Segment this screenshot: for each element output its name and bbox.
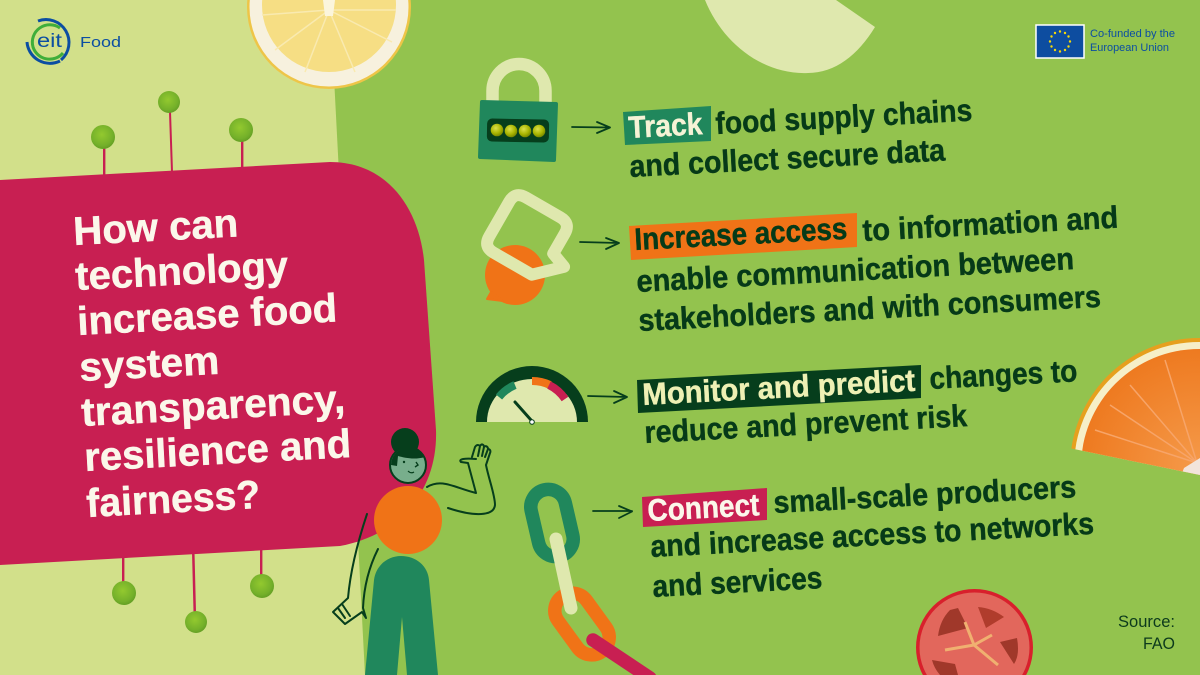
item: increase access: to information and — [862, 200, 1119, 248]
item: connect: small-scale producers — [773, 469, 1077, 520]
logo: EIT Food: eit — [37, 31, 63, 52]
title: resilience and — [83, 422, 352, 480]
title — [72, 201, 352, 526]
icon: chain links — [527, 486, 650, 675]
icon: padlock — [478, 64, 558, 162]
item: connect: Connect — [647, 487, 760, 528]
EU funding text: European Union — [1090, 42, 1169, 54]
pale left panel — [0, 0, 365, 675]
torso — [374, 486, 442, 554]
item: track — [623, 93, 973, 184]
arrow — [572, 122, 610, 133]
logo: EIT Food — [27, 20, 121, 63]
logo: EIT Food: Food — [80, 34, 121, 51]
peas on stems: bottom — [112, 549, 274, 633]
hair bun — [391, 428, 419, 456]
item: increase access — [629, 200, 1119, 338]
pale decorative wedge — [705, 0, 875, 73]
title: transparency, — [80, 377, 346, 435]
title panel — [0, 162, 436, 565]
source: FAO — [1143, 634, 1175, 653]
item: track: and collect secure data — [629, 132, 947, 184]
lemon slice — [247, 0, 411, 89]
arrow — [580, 238, 619, 249]
item: track: food supply chains — [715, 93, 973, 141]
item: increase access: stakeholders and with consumers — [638, 279, 1102, 338]
legs — [365, 556, 438, 675]
item: monitor and predict — [637, 353, 1078, 450]
item: increase access: Increase access — [634, 211, 848, 257]
person illustration — [333, 428, 495, 675]
item: connect — [642, 469, 1095, 604]
item: connect: and increase access to networks — [650, 506, 1095, 564]
title: fairness? — [85, 473, 261, 526]
orange slice — [1071, 338, 1200, 475]
item: connect: and services — [652, 560, 823, 604]
EU funding text: Co-funded by the — [1090, 28, 1175, 40]
title: technology — [74, 244, 290, 299]
peas on stems: top — [91, 91, 253, 175]
source: Source: — [1118, 612, 1175, 631]
title: system — [78, 339, 220, 390]
item: track: Track — [628, 106, 704, 145]
lowered arm — [333, 514, 378, 624]
source — [1118, 612, 1175, 653]
title: increase food — [76, 286, 338, 344]
tomato slice — [916, 589, 1033, 675]
title: How can — [72, 201, 239, 254]
item: monitor and predict: reduce and prevent risk — [644, 398, 969, 450]
EU funding text — [1090, 28, 1175, 54]
item: monitor and predict: changes to — [929, 353, 1078, 396]
head — [390, 447, 426, 483]
item: monitor and predict: Monitor and predict — [642, 363, 916, 412]
arrow — [588, 391, 627, 403]
item: increase access: enable communication between — [636, 241, 1075, 299]
arrow — [593, 506, 632, 518]
icon: gauge — [476, 366, 588, 424]
icon: speech bubbles — [483, 191, 585, 305]
EU flag — [1036, 25, 1084, 58]
raised arm — [427, 444, 495, 514]
